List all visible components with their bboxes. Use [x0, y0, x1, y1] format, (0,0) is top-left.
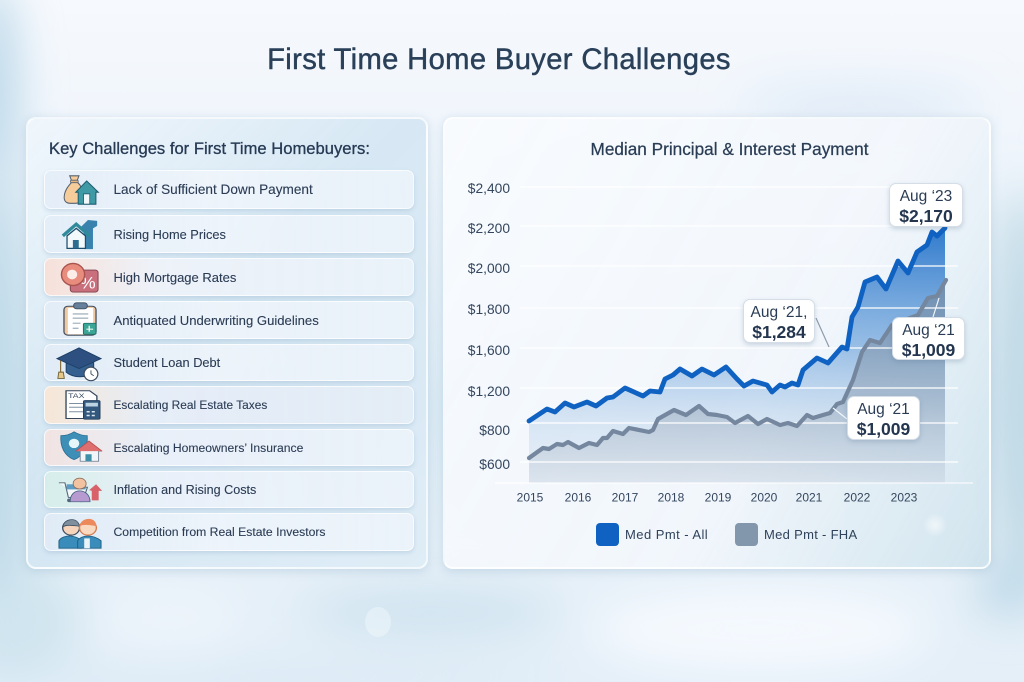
- y axis labels: $1,600: [468, 343, 510, 358]
- callout: Aug 21 all: $1,284: [752, 322, 806, 342]
- x axis labels: 2017: [612, 490, 639, 504]
- row: insurance: [44, 429, 414, 466]
- x axis labels: 2019: [705, 490, 732, 504]
- x axis labels: 2016: [565, 490, 592, 504]
- icon: tax form: [65, 390, 100, 420]
- callout: Aug 23: [889, 183, 963, 227]
- row: home prices: [44, 215, 414, 253]
- label: Rising Home Prices: [114, 226, 226, 242]
- series: all: [529, 228, 945, 421]
- panel heading: key challenges: Key Challenges for First Time Homebuyers:: [49, 139, 370, 158]
- x axis labels: 2020: [751, 490, 778, 504]
- icon: percent badge: %: [80, 272, 95, 292]
- icon: two people: [58, 518, 102, 549]
- bokeh dot: [923, 513, 947, 537]
- callout: Aug 21 upper: Aug ‘21: [902, 322, 955, 339]
- label: Antiquated Underwriting Guidelines: [114, 312, 319, 328]
- callout: Aug 23: Aug ‘23: [900, 188, 952, 205]
- x axis labels: [517, 490, 918, 504]
- legend: Med Pmt - FHA: [764, 527, 857, 542]
- row: student debt: [44, 344, 414, 381]
- row: underwriting: [44, 301, 414, 339]
- panel: key challenges: [26, 117, 428, 569]
- label: Student Loan Debt: [114, 355, 220, 370]
- x axis labels: 2021: [796, 490, 823, 504]
- y axis labels: $600: [479, 457, 510, 472]
- icon: shield and house: [60, 431, 102, 462]
- y axis labels: $2,400: [468, 181, 510, 196]
- x axis labels: 2018: [658, 490, 685, 504]
- legend: Med Pmt - All: [625, 527, 708, 542]
- leader lines: [816, 298, 939, 419]
- panel heading: chart title: Median Principal & Interest Payment: [590, 139, 868, 159]
- row: inflation: [44, 471, 414, 508]
- label: Inflation and Rising Costs: [114, 482, 256, 496]
- icon: clipboard: [63, 302, 97, 336]
- row: mortgage rates: [44, 258, 414, 296]
- bokeh dot: [365, 607, 391, 637]
- y axis labels: $2,200: [468, 221, 510, 236]
- callout: Aug 21 FHA: Aug ‘21: [857, 401, 910, 418]
- label: Competition from Real Estate Investors: [114, 525, 326, 539]
- callout: Aug 21 upper: $1,009: [902, 340, 955, 360]
- x axis labels: 2023: [891, 490, 918, 504]
- legend: [596, 523, 857, 546]
- icon: percent badge: [60, 262, 99, 292]
- icon: house with arrow: [62, 220, 98, 250]
- label: High Mortgage Rates: [114, 270, 236, 284]
- callout: Aug 21 FHA: [847, 396, 920, 440]
- callout: Aug 21 all: [743, 299, 815, 343]
- callout: Aug 21 FHA: $1,009: [857, 419, 910, 439]
- icon: tax form: TAX: [68, 392, 84, 399]
- y axis labels: $1,800: [468, 302, 510, 317]
- area fills: [529, 228, 945, 483]
- callout: Aug 21 upper: [892, 317, 965, 360]
- label: Escalating Real Estate Taxes: [114, 398, 267, 412]
- row: investors: [44, 513, 414, 551]
- icon: cart and person: [58, 478, 102, 502]
- y axis labels: $800: [479, 423, 510, 438]
- row: down payment: [44, 170, 414, 209]
- panel: chart: [443, 117, 991, 569]
- label: Lack of Sufficient Down Payment: [114, 182, 313, 197]
- icon: graduation cap: [56, 347, 102, 382]
- y axis labels: $2,000: [468, 261, 510, 276]
- row: taxes: [44, 386, 414, 424]
- icon: money bag and house: [64, 175, 100, 205]
- y axis labels: $1,200: [468, 384, 510, 399]
- callout: Aug 21 all: Aug ‘21,: [751, 304, 807, 321]
- x axis labels: 2022: [844, 490, 871, 504]
- grid lines: [495, 187, 973, 483]
- series: FHA: [529, 280, 946, 458]
- label: Escalating Homeowners’ Insurance: [114, 440, 303, 454]
- callout: Aug 23: $2,170: [899, 206, 953, 226]
- x axis labels: 2015: [517, 490, 544, 504]
- y axis labels: [468, 181, 510, 472]
- title: First Time Home Buyer Challenges: [267, 44, 731, 76]
